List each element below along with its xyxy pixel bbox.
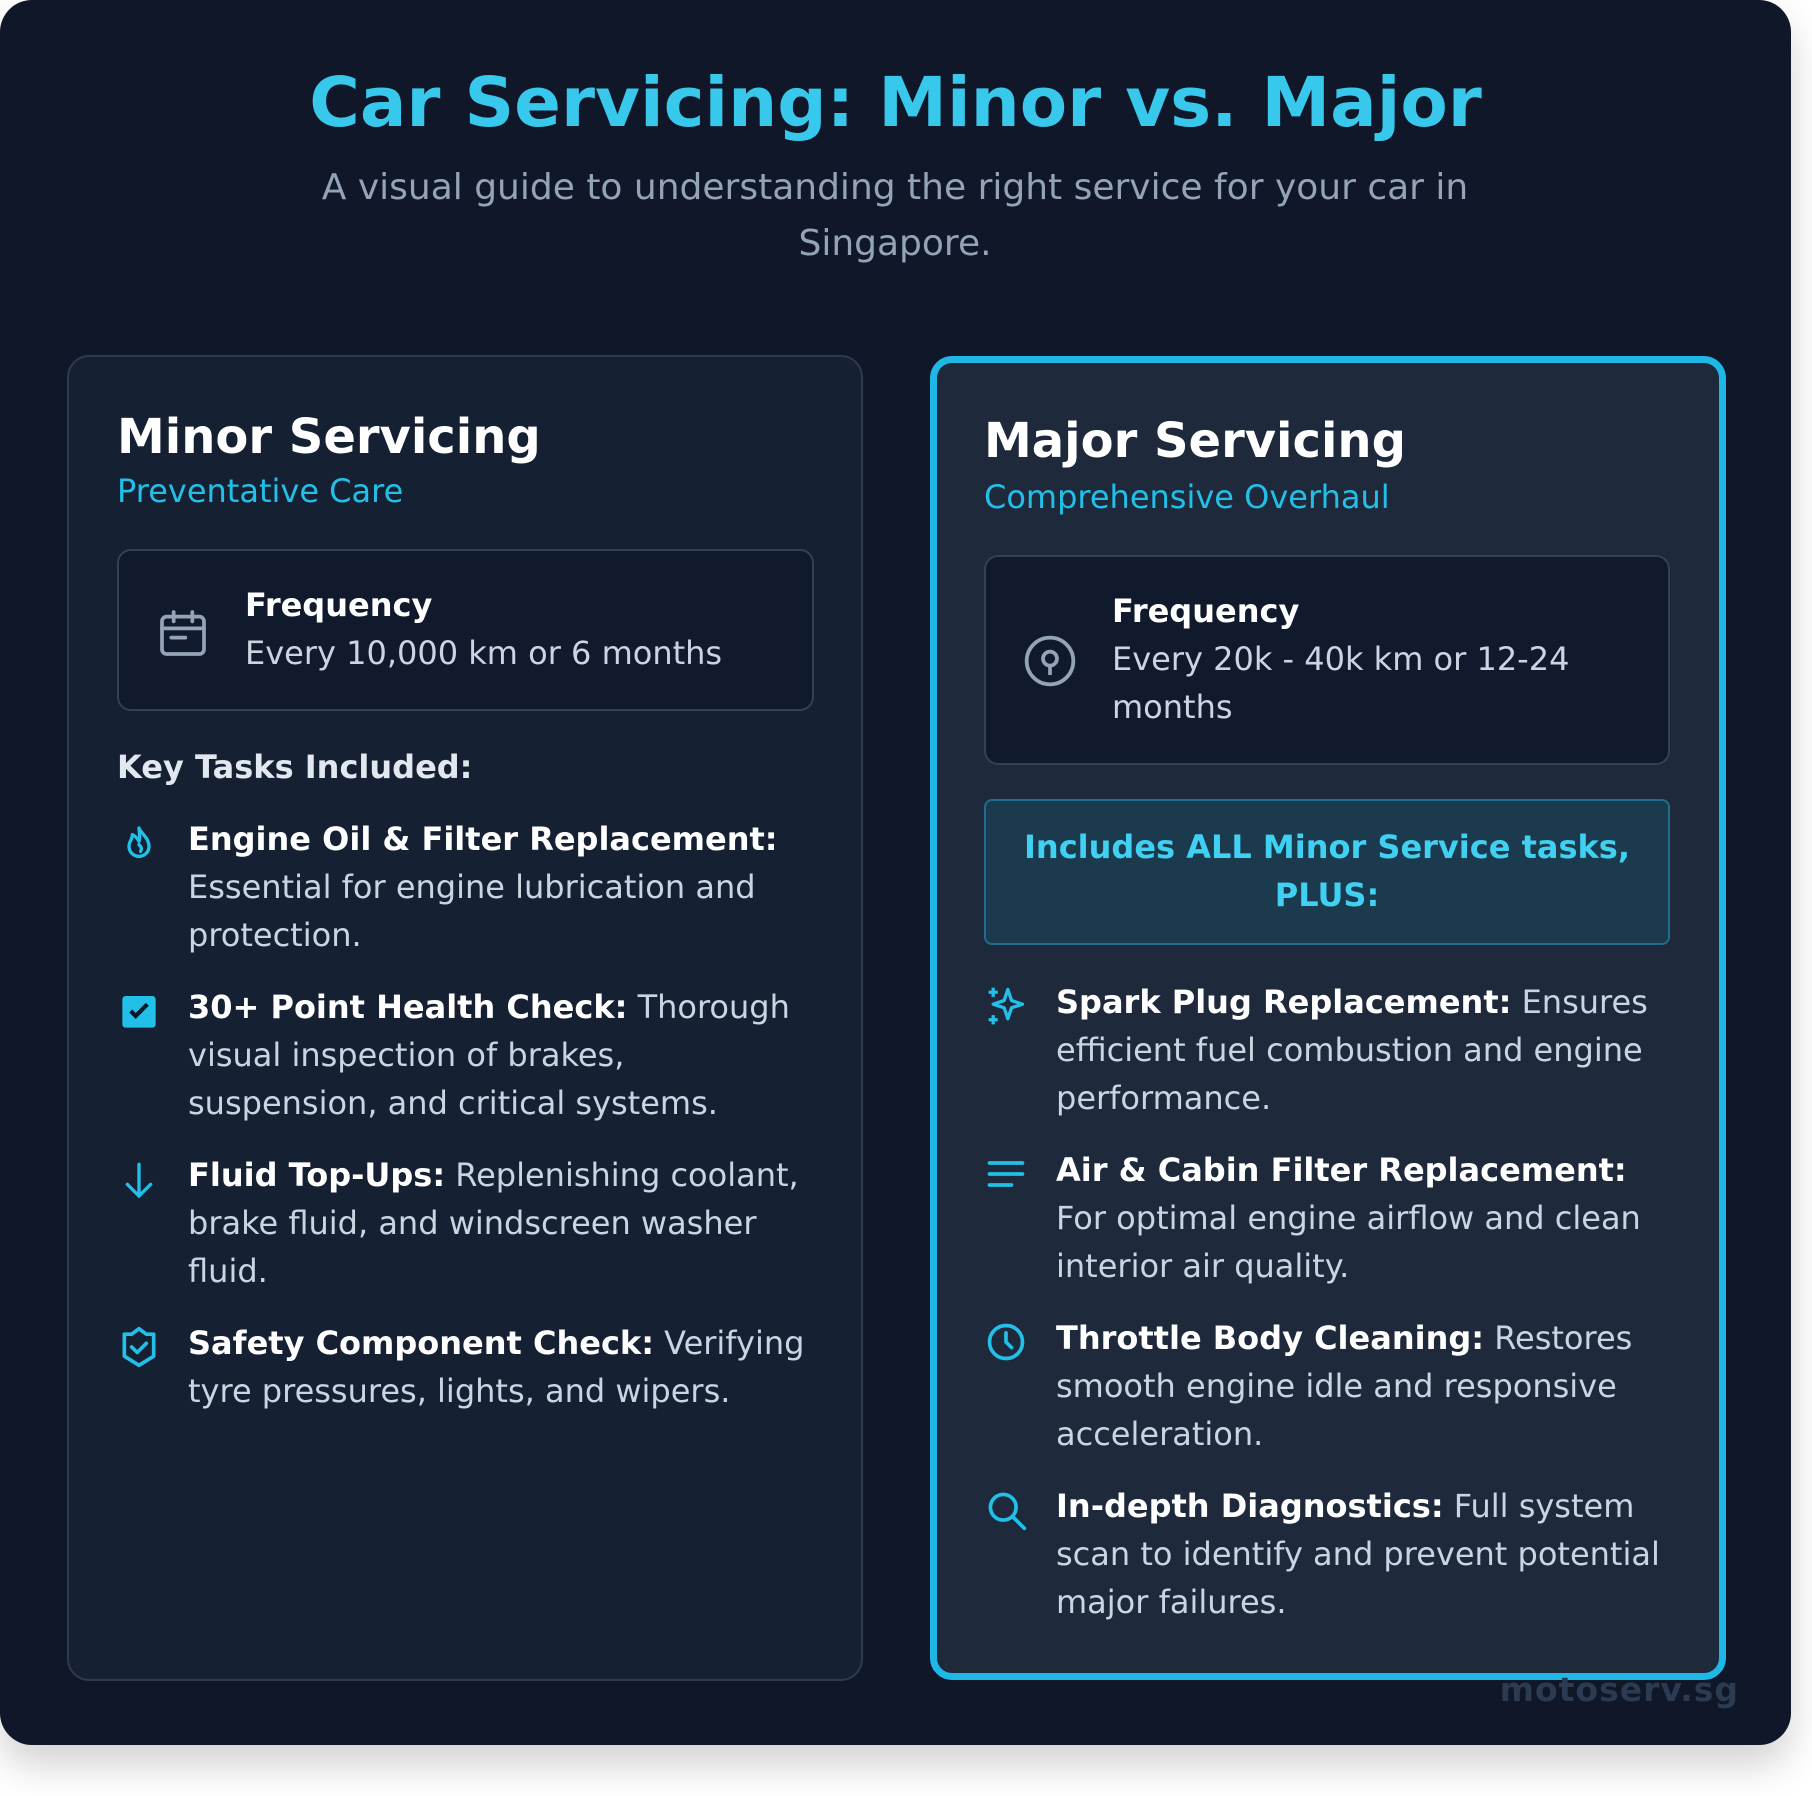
subheading: comprehensive overhaul: Comprehensive Overhaul bbox=[984, 478, 1390, 516]
frequency text: Every 20k - 40k km or 12-24 months bbox=[1112, 640, 1569, 726]
icon: shield check bbox=[122, 1326, 156, 1368]
panel: minor servicing bbox=[67, 355, 863, 1681]
frequency box bbox=[984, 555, 1670, 765]
icon: flame bbox=[127, 826, 151, 858]
icon: sparkles bbox=[988, 988, 1024, 1024]
task: diagnostics: In-depth Diagnostics: Full system scan to identify and prevent potential major failures. bbox=[1056, 1487, 1660, 1621]
callout: includes all minor tasks: Includes ALL Minor Service tasks, PLUS: bbox=[1024, 828, 1630, 914]
heading: minor: Minor Servicing bbox=[117, 409, 541, 465]
task: air & cabin filter: Air & Cabin Filter Replacement: For optimal engine airflow and clean interior air quality. bbox=[1056, 1151, 1641, 1285]
task list: major bbox=[988, 983, 1660, 1621]
subheading: preventative care: Preventative Care bbox=[117, 472, 403, 510]
frequency text bbox=[1112, 592, 1569, 726]
icon: clock bbox=[988, 1324, 1024, 1360]
icon: checkbox bbox=[122, 996, 156, 1028]
task: fluid top-ups: Fluid Top-Ups: Replenishing coolant, brake fluid, and windscreen washer fluid. bbox=[188, 1156, 799, 1290]
task list: minor bbox=[122, 820, 804, 1410]
icon: lines bbox=[988, 1161, 1024, 1187]
key tasks heading: Key Tasks Included: bbox=[117, 748, 472, 786]
icon: gauge bbox=[1024, 636, 1076, 686]
frequency text: Frequency bbox=[245, 586, 432, 624]
icon: down arrow bbox=[126, 1162, 152, 1198]
task: health check: 30+ Point Health Check: Thorough visual inspection of brakes, suspension, and critical systems. bbox=[188, 988, 790, 1122]
frequency box bbox=[117, 549, 814, 711]
watermark: motoserv.sg bbox=[1500, 1670, 1739, 1709]
task: spark plug: Spark Plug Replacement: Ensures efficient fuel combustion and engine performance. bbox=[1056, 983, 1648, 1117]
task: engine oil: Engine Oil & Filter Replacement: Essential for engine lubrication and protection. bbox=[188, 820, 778, 954]
icon: magnifier bbox=[988, 1492, 1026, 1530]
panel: major servicing bbox=[930, 356, 1726, 1680]
task: throttle body: Throttle Body Cleaning: Restores smooth engine idle and responsive acceleration. bbox=[1056, 1319, 1632, 1453]
frequency text: Every 10,000 km or 6 months bbox=[245, 634, 722, 672]
callout: includes all minor tasks bbox=[984, 799, 1670, 945]
task: safety check: Safety Component Check: Verifying tyre pressures, lights, and wipers. bbox=[188, 1324, 804, 1410]
icon: calendar bbox=[160, 610, 206, 656]
subtitle: A visual guide to understanding the right service for your car in Singapore. bbox=[322, 167, 1468, 264]
heading: major: Major Servicing bbox=[984, 413, 1406, 469]
title: Car Servicing: Minor vs. Major bbox=[309, 63, 1482, 143]
frequency text bbox=[245, 586, 722, 672]
frequency text: Frequency bbox=[1112, 592, 1299, 630]
